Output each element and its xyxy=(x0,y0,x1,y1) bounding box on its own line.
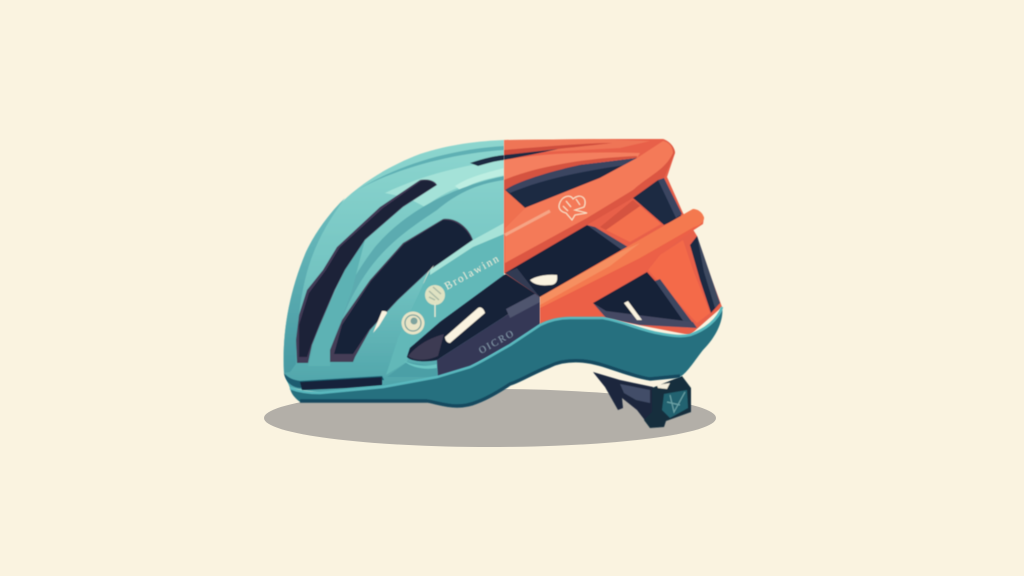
grey panel text: OICRO xyxy=(477,329,516,357)
cream vent slot xyxy=(445,307,485,343)
left vent xyxy=(296,179,437,363)
upper orange vent xyxy=(505,158,637,208)
strap emblem line art xyxy=(559,196,587,220)
white oval in vent xyxy=(530,275,557,285)
teal shell base xyxy=(284,140,504,393)
grey side panel xyxy=(437,297,540,377)
brim underside shade xyxy=(300,361,680,406)
lower centre vent xyxy=(593,272,693,323)
upper orange rib xyxy=(504,153,640,190)
rear retention strap and dial xyxy=(593,372,691,428)
white slit in centre vent xyxy=(373,311,387,333)
lower orange strap xyxy=(540,209,704,308)
middle orange vent xyxy=(505,225,627,297)
lower strap shade xyxy=(387,362,437,377)
front lip xyxy=(284,373,384,388)
ground shadow xyxy=(264,389,716,447)
main orange strap xyxy=(505,141,675,273)
brim highlight line xyxy=(290,307,722,393)
lower rib tone between vents xyxy=(308,240,365,366)
lower orange strap shade xyxy=(540,209,704,325)
teal outer rim shading xyxy=(284,198,345,373)
right lower vent xyxy=(690,236,720,313)
logo strap text: Brolawinn xyxy=(443,253,501,293)
helmet shell xyxy=(284,140,504,393)
front dark slot xyxy=(300,377,382,390)
centre orange panel xyxy=(600,200,661,242)
orange crown xyxy=(504,139,722,335)
teal rib highlight xyxy=(385,160,504,207)
lower teal brim band xyxy=(284,307,722,407)
navy sliver xyxy=(504,149,558,160)
orange shell xyxy=(504,139,722,335)
plant emblem xyxy=(425,285,445,317)
top teal vent sliver xyxy=(470,155,504,166)
right orange column xyxy=(648,240,710,323)
teal logo strap xyxy=(386,228,504,375)
centre vent xyxy=(330,219,473,362)
round emblem xyxy=(402,312,424,334)
right upper vent xyxy=(633,180,682,225)
lower teal side vent xyxy=(407,268,560,377)
